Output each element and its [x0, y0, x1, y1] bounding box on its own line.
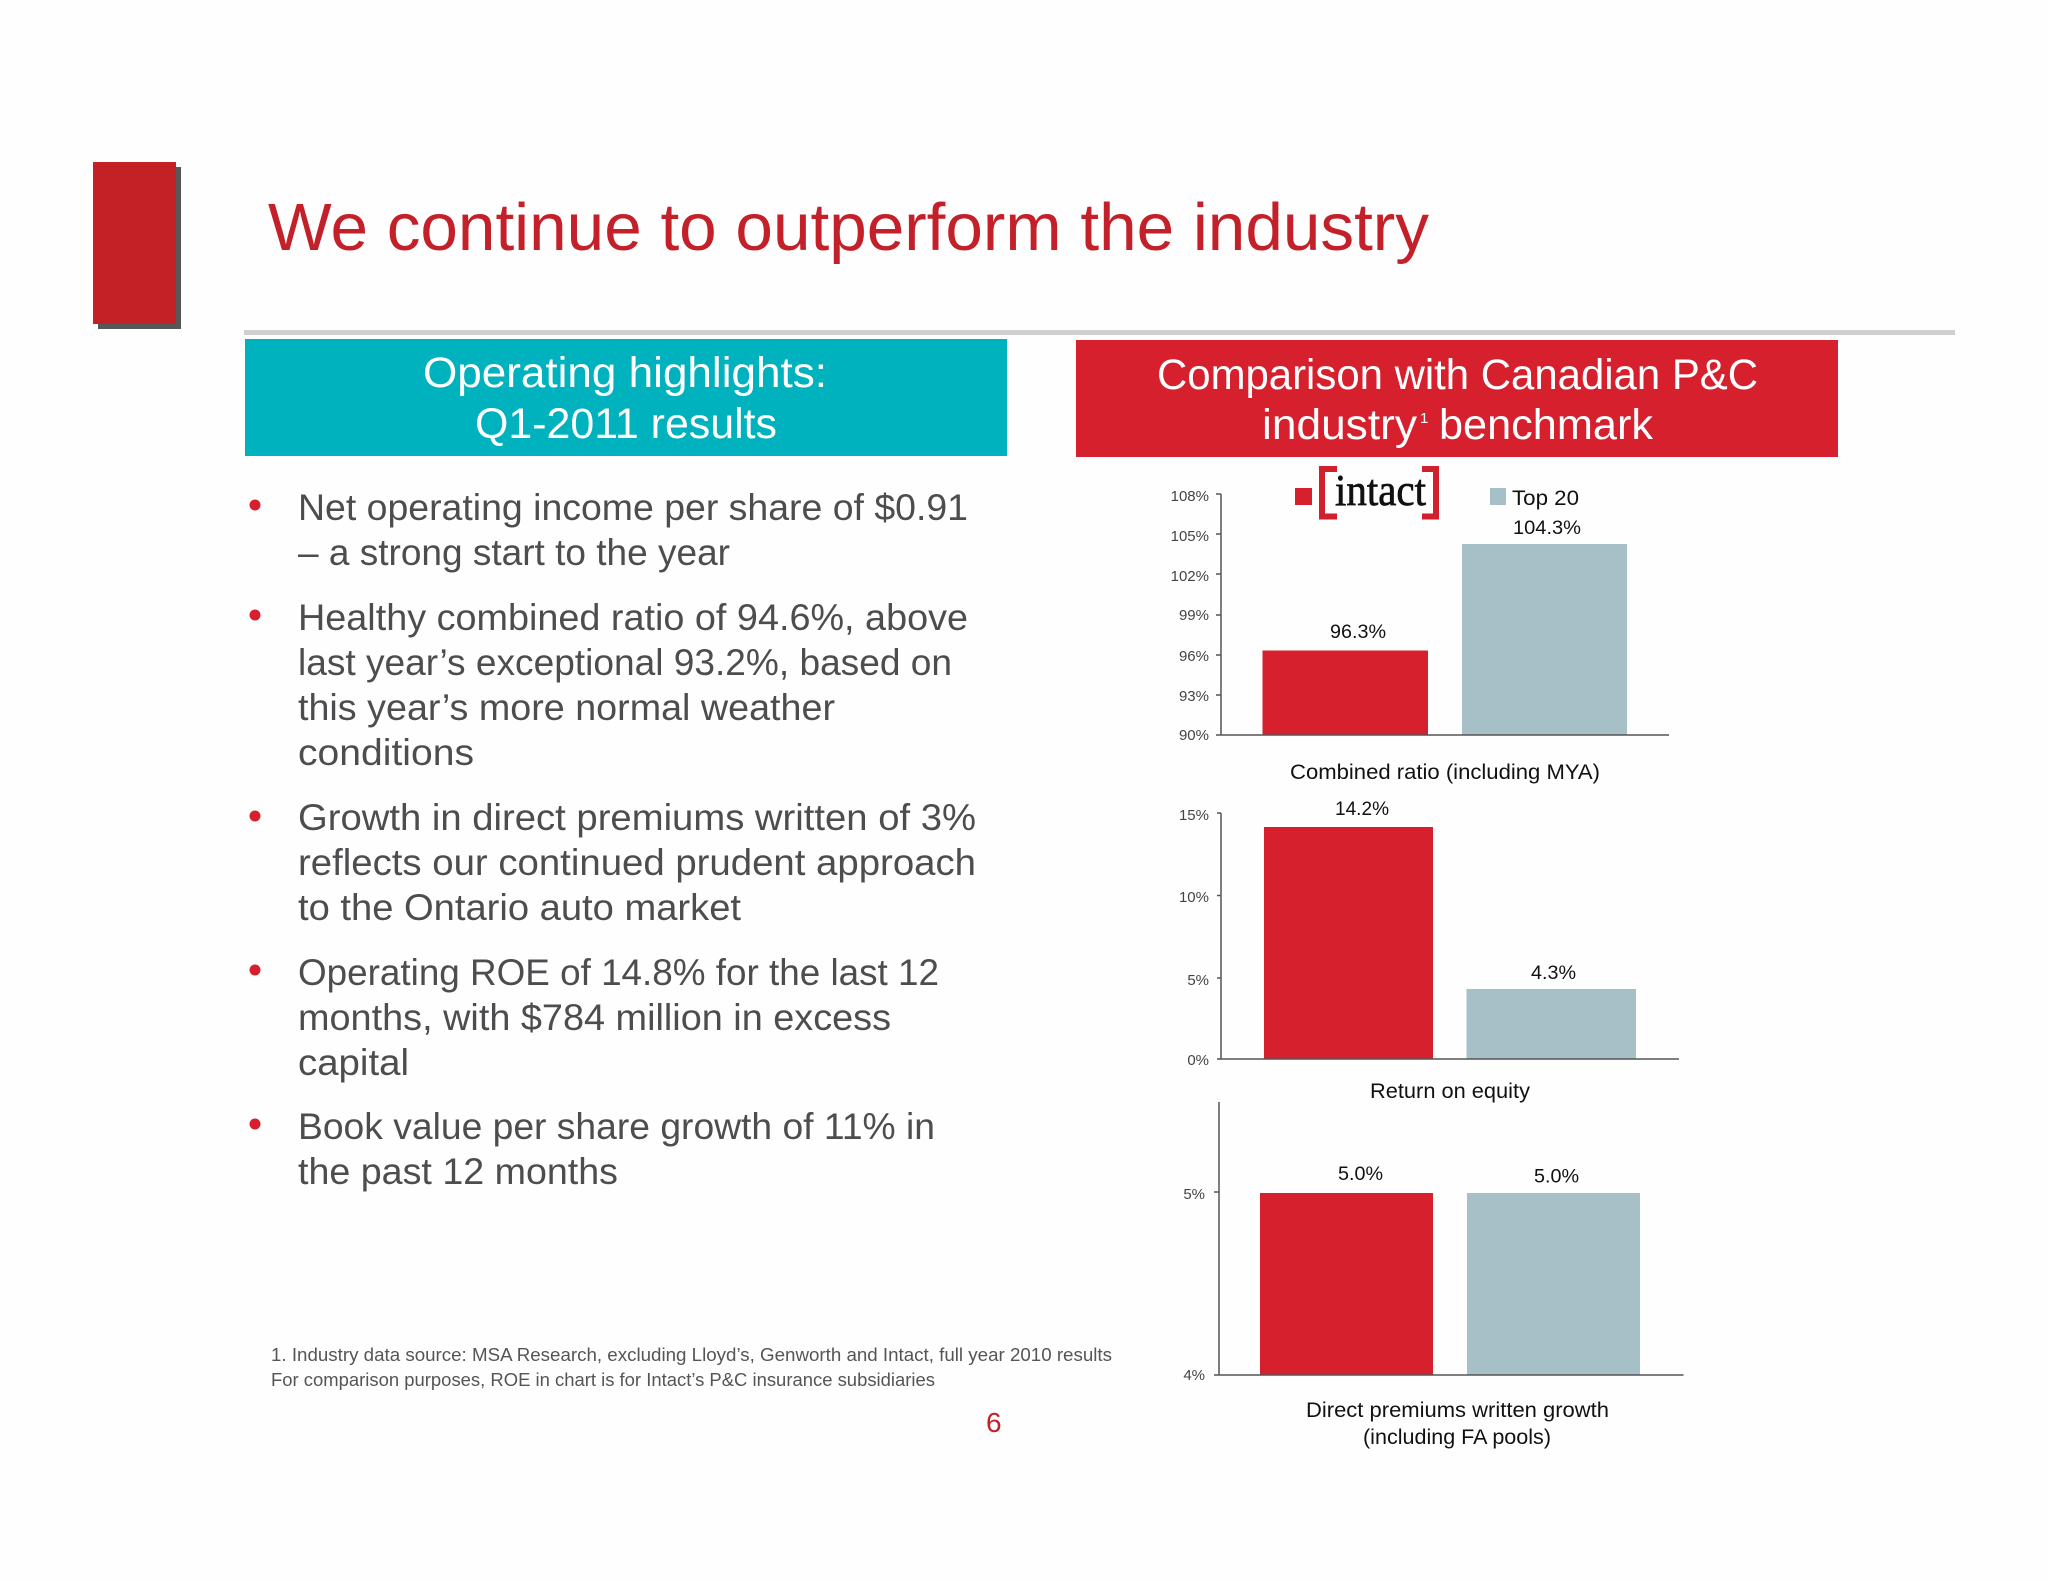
panel header: comparison with industry benchmark: industry: [1262, 401, 1417, 449]
bullet: operating ROE: capital: [298, 1042, 409, 1083]
bullet: direct premiums: [250, 797, 976, 928]
axis labels: 102%: [1171, 568, 1209, 585]
panel header: comparison with industry benchmark: 1: [1420, 410, 1428, 427]
bullet: combined ratio: conditions: [298, 732, 474, 773]
caption: (including FA pools): [1363, 1426, 1551, 1449]
bullet: direct premiums: to the Ontario auto market: [298, 887, 742, 928]
bullet: net operating income: [250, 487, 968, 573]
icon: intact swatch: [1295, 488, 1312, 505]
bullet: combined ratio: last year’s exceptional 93.2%, based on: [298, 642, 952, 683]
panel header: operating highlights: Operating highlights:: [423, 349, 827, 397]
value: intact: 96.3%: [1330, 622, 1386, 643]
axis labels: 5%: [1187, 972, 1209, 989]
axis labels: 10%: [1179, 889, 1209, 906]
bars: [1260, 1193, 1640, 1375]
bullet: net operating income: Net operating income per share of $0.91: [298, 487, 968, 528]
value: intact: 5.0%: [1338, 1164, 1383, 1185]
legend: [1295, 466, 1579, 516]
bullet: operating ROE: [250, 952, 939, 1083]
bullet: book value: Book value per share growth of 11% in: [298, 1106, 935, 1147]
bullet: net operating income: – a strong start to the year: [298, 532, 730, 573]
axis labels: [1179, 807, 1209, 1069]
caption: Combined ratio (including MYA): [1290, 761, 1600, 784]
axis labels: 105%: [1171, 528, 1209, 545]
icon: top 20 swatch: [1490, 488, 1506, 505]
value: top 20: 5.0%: [1534, 1166, 1579, 1188]
bullet: combined ratio: [250, 597, 968, 773]
axis labels: [1171, 488, 1209, 744]
chart: return on equity: [1179, 799, 1679, 1103]
panel header: operating highlights: Q1-2011 results: [475, 400, 777, 448]
caption: Return on equity: [1370, 1080, 1531, 1103]
panel header: comparison with industry benchmark: Comparison with Canadian P&C: [1157, 351, 1758, 399]
value: top 20: 104.3%: [1513, 518, 1581, 539]
logo: intact: intact: [1335, 466, 1426, 515]
axis labels: 0%: [1187, 1052, 1209, 1069]
axis labels: 5%: [1183, 1186, 1205, 1203]
footnote: 1. Industry data source: MSA Research, excluding Lloyd’s, Genworth and Intact, full year 2010 results: [271, 1345, 1112, 1365]
panel header: comparison with industry benchmark: [1076, 340, 1838, 457]
bullet list: operating highlights: [250, 487, 976, 1192]
axis labels: 90%: [1179, 727, 1209, 744]
bullet: book value: [250, 1106, 935, 1192]
caption: Direct premiums written growth: [1306, 1399, 1609, 1422]
title: We continue to outperform the industry: [268, 190, 1430, 265]
axis labels: [1183, 1186, 1205, 1384]
page number: 6: [986, 1407, 1002, 1438]
caption: [1306, 1399, 1609, 1449]
chart: direct premiums written growth: [1183, 1102, 1684, 1449]
footnote: For comparison purposes, ROE in chart is for Intact’s P&C insurance subsidiaries: [271, 1370, 935, 1390]
bullet: book value: the past 12 months: [298, 1151, 618, 1192]
bullet: direct premiums: Growth in direct premiums written of 3%: [298, 797, 976, 838]
axis labels: 93%: [1179, 688, 1209, 705]
value: intact: 14.2%: [1335, 799, 1389, 820]
value: top 20: 4.3%: [1531, 963, 1576, 984]
bullet: combined ratio: Healthy combined ratio of 94.6%, above: [298, 597, 968, 638]
panel header: comparison with industry benchmark: benchmark: [1439, 401, 1653, 449]
axis labels: 4%: [1183, 1367, 1205, 1384]
chart: combined ratio: [1171, 488, 1669, 784]
bullet: combined ratio: this year’s more normal weather: [298, 687, 835, 728]
axis labels: 108%: [1171, 488, 1209, 505]
axis labels: 99%: [1179, 607, 1209, 624]
axis labels: 15%: [1179, 807, 1209, 824]
legend label: top 20: Top 20: [1512, 487, 1579, 510]
bars: [1264, 827, 1636, 1059]
bullet: direct premiums: reflects our continued prudent approach: [298, 842, 976, 883]
axis labels: 96%: [1179, 648, 1209, 665]
bullet: operating ROE: Operating ROE of 14.8% for the last 12: [298, 952, 939, 993]
bullet: operating ROE: months, with $784 million in excess: [298, 997, 891, 1038]
footnote: [271, 1345, 1112, 1390]
decorative red block with shadow: [93, 162, 181, 329]
panel header: operating highlights: [245, 339, 1007, 456]
bars: [1262, 544, 1627, 735]
